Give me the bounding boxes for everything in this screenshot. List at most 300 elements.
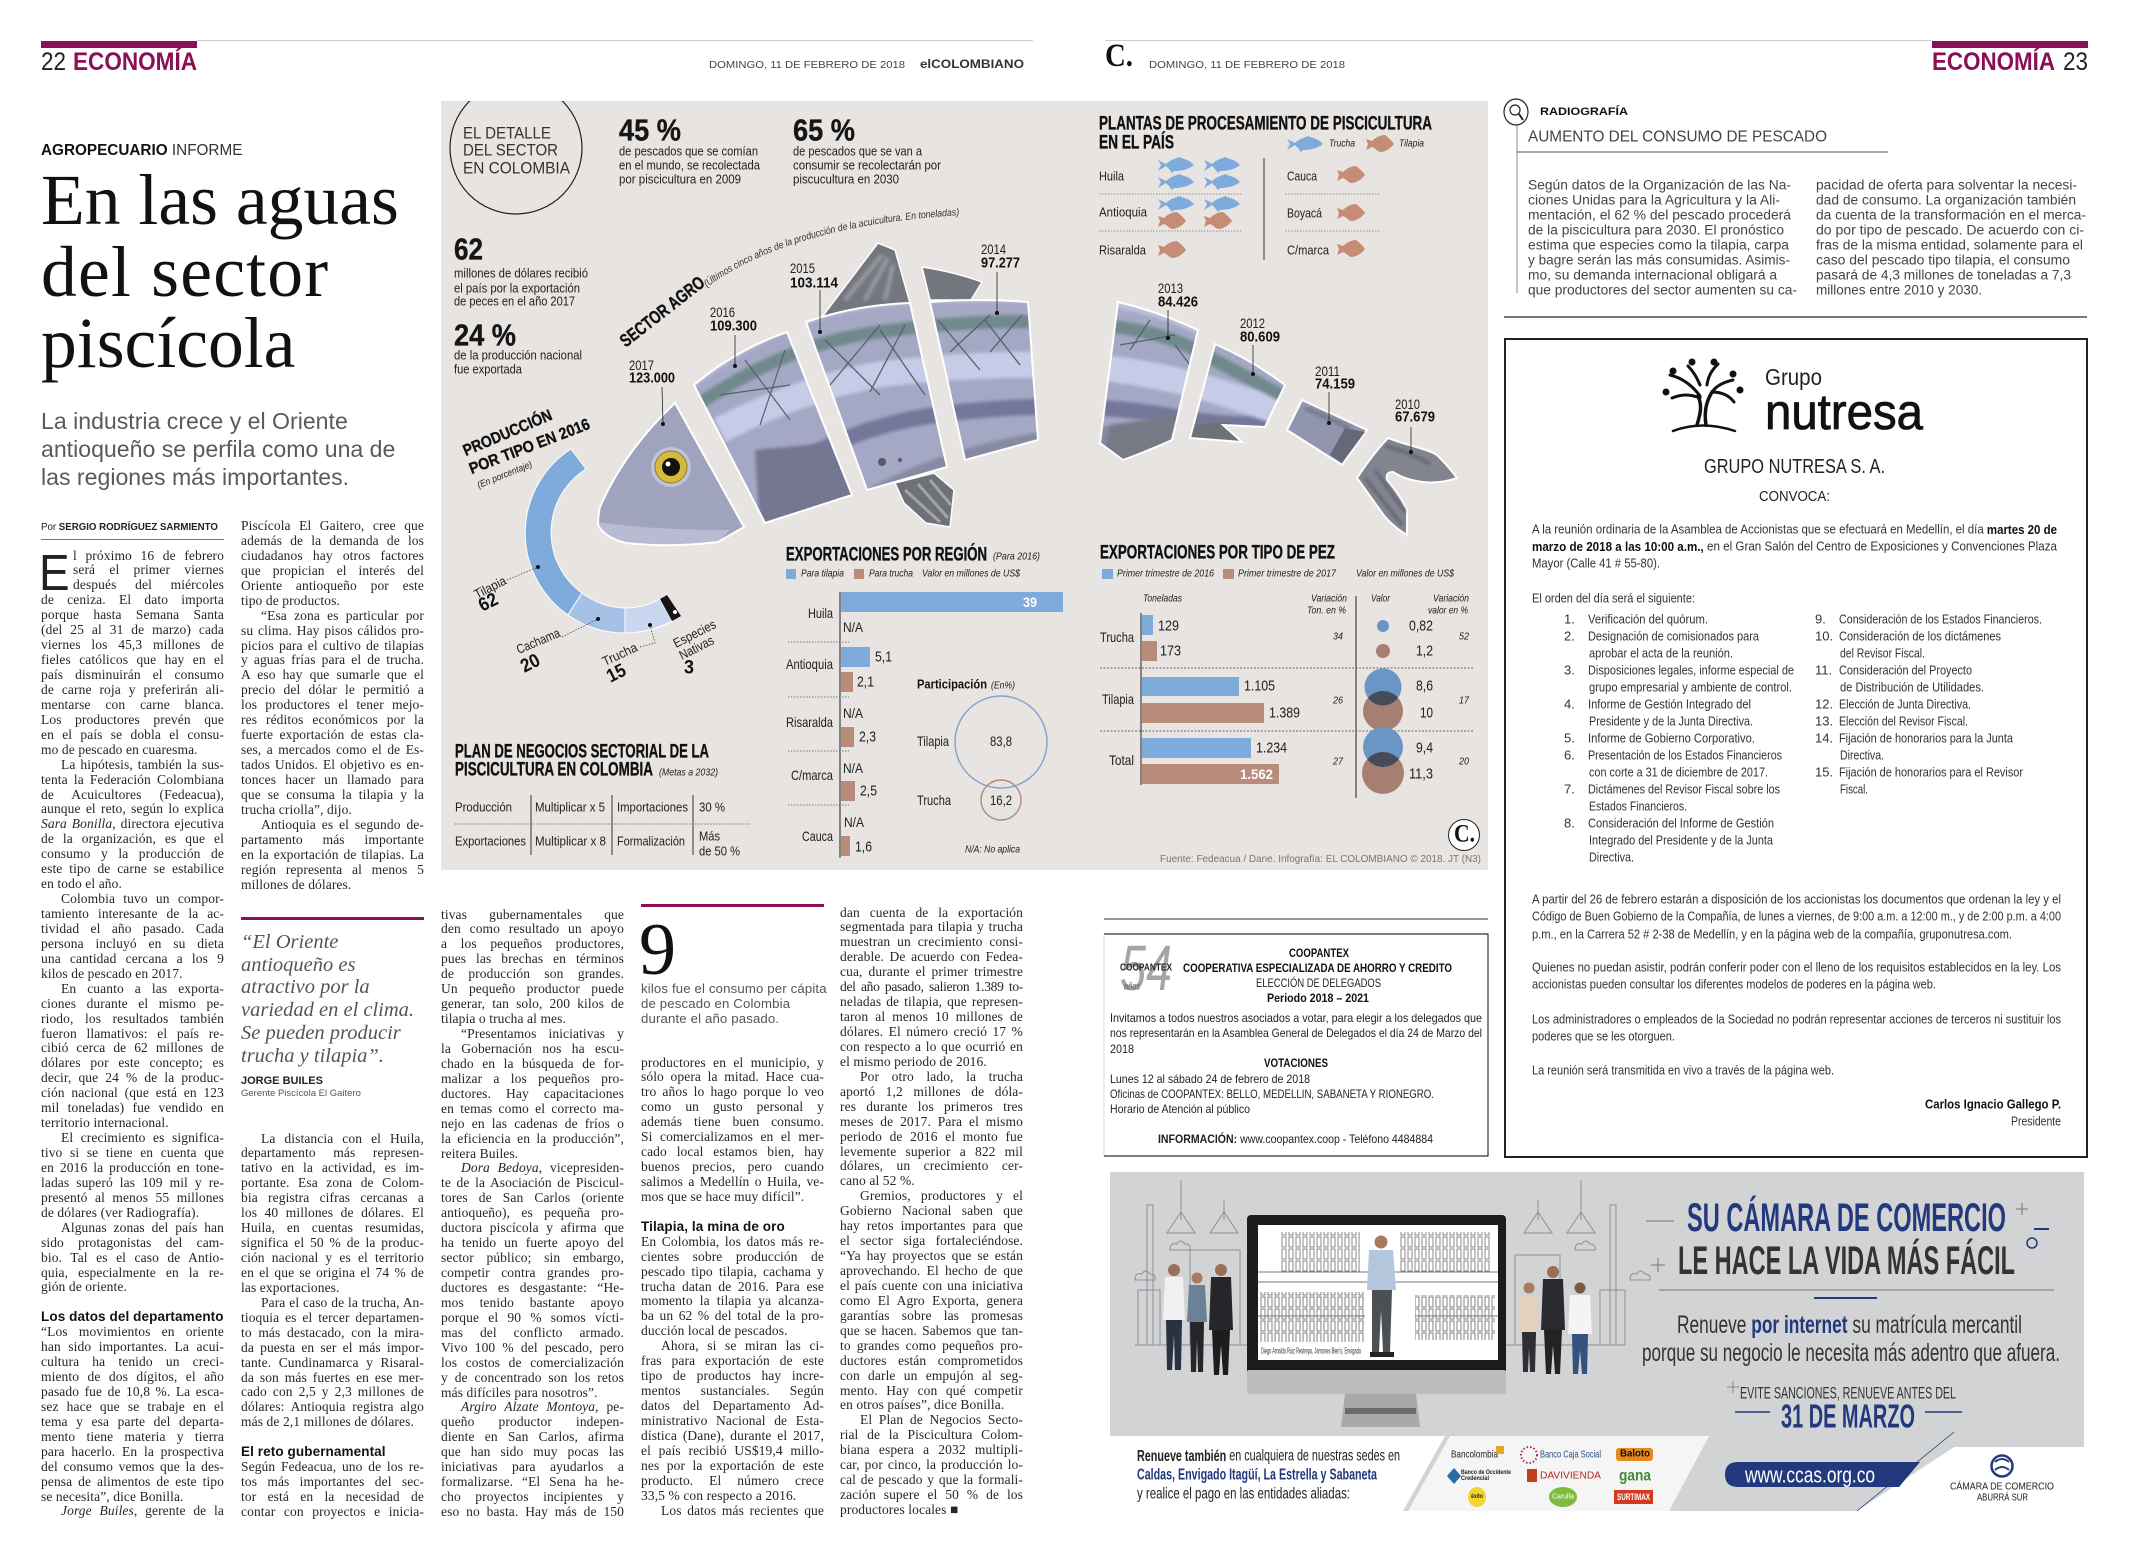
panel: coopantex notice: ELECCIÓN DE DELEGADOS — [1256, 975, 1381, 990]
panel: grupo nutresa notice: GRUPO NUTRESA S. A. — [1704, 456, 1885, 478]
article column 5 — [840, 904, 1023, 1517]
illustration: computer monitor with store — [1247, 1215, 1506, 1427]
article column 1: tividad el año pasado. Cada — [41, 921, 224, 936]
article column 3: y de concentrado son los retos — [441, 1370, 624, 1385]
article column 4: datos del Departamento Ad- — [641, 1398, 824, 1413]
list: orden del día, right: Consideración de los dictámenes — [1839, 628, 2001, 644]
article column 5: Gremios, productores y el — [860, 1188, 1023, 1203]
stat: 45 %: en el mundo, se recolectada — [619, 158, 761, 172]
panel: radiografía: ciones Unidas para la Agricultura y la Ali- — [1528, 192, 1780, 208]
article column 1: después del miércoles — [73, 577, 224, 592]
chart: producción por tipo donut: Cachama — [514, 625, 563, 657]
article column 1 — [41, 548, 224, 1518]
chart: producción por tipo donut: POR TIPO EN 2016 — [467, 416, 593, 478]
logo: cámara de comercio aburrá sur — [1950, 1456, 2054, 1504]
article column 1: l próximo 16 de febrero — [73, 548, 224, 562]
article column 4: ba un 62 % del total de la pro- — [641, 1308, 824, 1323]
list: orden del día, right: Elección de Junta Directiva. — [1839, 696, 1971, 712]
table: plan de negocios sectorial: Multiplicar x 8 — [535, 834, 606, 848]
callout: 9 kilos — [641, 904, 824, 1032]
article column 2, top: precio del dólar le permitió a — [241, 682, 424, 697]
chart: exportaciones por tipo de pez: Primer trimestre de 2016 — [1117, 568, 1214, 580]
chart: exportaciones por tipo de pez: Total — [1109, 752, 1134, 768]
article column 3: tilapia o trucha al mes. — [441, 1011, 566, 1026]
article column 1: Colombia tuvo un compor- — [61, 891, 224, 906]
stat: 62 millones: millones de dólares recibió — [454, 266, 588, 280]
article column 3: te de la Asociación de Piscicul- — [441, 1175, 624, 1190]
article column 1: tenta la Federación Colombiana — [41, 772, 224, 787]
article column 2, top: ses, a mercados como el de Es- — [241, 742, 424, 757]
article column 3: generar, tan solo, 200 kilos de — [441, 996, 624, 1011]
article column 4: pescado tipo tilapia, cachama y — [641, 1264, 824, 1279]
stat: 65 %: 65 % — [793, 112, 855, 148]
article column 2, top: los productores el tener mejo- — [241, 697, 424, 712]
chart: exportaciones por tipo de pez: 17 — [1459, 696, 1469, 706]
list: orden del día, right: de Distribución de Utilidades. — [1840, 680, 1984, 694]
labels: years and tonnage: 2012 — [1240, 315, 1265, 331]
list: orden del día, right: Fijación de honorarios para el Revisor — [1839, 764, 2024, 780]
table: plan de negocios sectorial: PLAN DE NEGOCIOS SECTORIAL DE LA — [455, 742, 709, 762]
article column 4: En Colombia, los datos más re- — [641, 1234, 824, 1249]
article column 5: meses de 2017. Para el mismo — [840, 1114, 1023, 1129]
article column 1: mento tiene materia y tierra — [41, 1429, 224, 1444]
panel: grupo nutresa notice: Grupo — [1765, 364, 1822, 390]
panel: infographic — [441, 101, 1525, 870]
article column 1: porque hasta Semana Santa — [41, 607, 224, 622]
article column 1: del consumo vemos que la des- — [41, 1459, 224, 1474]
panel: radiografía: pasará de 4,3 millones de toneladas a 7,3 — [1816, 268, 2071, 282]
article column 5: mento. Hay con qué competir — [840, 1382, 1023, 1398]
panel: radiografía: Según datos de la Organización de las Na- — [1528, 178, 1791, 192]
list: orden del día, right: 10. — [1815, 628, 1833, 644]
article column 5: del año pasado, salieron 1.389 to- — [840, 979, 1023, 994]
chart: exportaciones por tipo de pez: Ton. en % — [1307, 606, 1346, 616]
labels: years and tonnage: 2017 — [629, 357, 654, 373]
illustration: fish cut in segments — [597, 242, 1458, 546]
chart: participación circles: Tilapia — [917, 733, 949, 749]
chart: exportaciones por región: 2,1 — [857, 674, 874, 690]
labels: years and tonnage: 103.114 — [790, 274, 839, 292]
article column 3: reitera Builes. — [441, 1146, 518, 1160]
article column 2, top: y aguas frías para el de trucha. — [241, 652, 424, 667]
icon: magnifier — [1504, 99, 1528, 125]
stat: 45 %: de pescados que se comían — [619, 144, 758, 158]
article column 2, bottom: las exportaciones. — [241, 1280, 340, 1295]
list: orden del día, left: Verificación del quórum. — [1588, 612, 1708, 626]
article column 2, top: trucha criolla”, dijo. — [241, 802, 352, 817]
article column 5: cal de pescado y que la formali- — [840, 1472, 1023, 1487]
icon: el colombiano logo — [1448, 820, 1480, 850]
article column 3: a los pequeños productores, — [441, 936, 624, 951]
banner bottom strip: other locations: y realice el pago en las entidades aliadas: — [1137, 1486, 1350, 1502]
article column 1: mo de pescado en cuaresma. — [41, 742, 198, 757]
panel: radiografía: millones entre 2010 y 2030. — [1816, 282, 1982, 298]
chart: exportaciones por tipo de pez: 52 — [1459, 632, 1469, 642]
article column 4: trucha datan de 2016. Para ese — [641, 1279, 824, 1294]
panel: coopantex notice: Horario de Atención al público — [1110, 1102, 1250, 1116]
article column 4: producto. El número crece — [641, 1473, 824, 1488]
table: plan de negocios sectorial: Multiplicar x 5 — [535, 800, 605, 814]
chart: exportaciones por región: Cauca — [802, 828, 833, 844]
list: orden del día, right: Consideración del Proyecto — [1839, 662, 1972, 678]
chart: producción por tipo donut: 20 — [517, 650, 544, 677]
illustration: city line art — [1135, 1180, 1650, 1345]
list: orden del día, right: 15. — [1815, 764, 1833, 780]
chart: exportaciones por tipo de pez: Trucha — [1100, 629, 1134, 645]
article column 2, top: ciudadanos hay otros factores — [241, 548, 424, 563]
chart: exportaciones por tipo de pez: Tilapia — [1102, 691, 1134, 707]
article column 5: to grandes como pequeños pro- — [840, 1338, 1023, 1353]
article column 2, bottom: cado con 2,5 y 2,3 millones de — [241, 1384, 424, 1399]
article column 4: cientes sobre producción de — [641, 1249, 824, 1264]
article column 5: derable. De acuerdo con Fedea- — [840, 949, 1023, 964]
article column 1: este tipo de carne se estabilice — [41, 861, 224, 876]
article column 4: buenos precios, pero cuando — [641, 1159, 824, 1174]
url pill — [1725, 1432, 2084, 1511]
chart: exportaciones por tipo de pez: 1.105 — [1244, 678, 1275, 694]
heading: sector agro: SECTOR AGRO — [616, 272, 709, 351]
article column 2, bottom: bia registra cifras cercanas a — [241, 1190, 424, 1205]
article column 1: cibió cerca de 62 millones de — [41, 1040, 224, 1055]
article column 1: consumo y la producción de — [41, 846, 224, 861]
chart: exportaciones por tipo de pez: 1.234 — [1256, 740, 1287, 756]
chart: participación circles: Participación — [917, 676, 987, 692]
chart: exportaciones por tipo de pez: EXPORTACIONES POR TIPO DE PEZ — [1100, 542, 1335, 564]
article column 3: cho proyectos incipientes y — [441, 1489, 624, 1504]
source credit: Fuente: Fedeacua / Dane. Infografía: EL COLOMBIANO © 2018. JT (N3) — [1160, 853, 1481, 865]
callout: el detalle del sector: EL DETALLE — [463, 124, 551, 142]
chart: exportaciones por tipo de pez: 1.389 — [1269, 704, 1300, 722]
panel: grupo nutresa notice — [1505, 339, 2087, 1157]
article column 1: sez hace que se trabaje en el — [41, 1399, 224, 1414]
article column 4: ministrativo Nacional de Esta- — [641, 1413, 824, 1428]
article column 5: el país cuente con una iniciativa — [840, 1278, 1023, 1293]
panel: radiografía: RADIOGRAFÍA — [1540, 105, 1628, 118]
table: plan de negocios sectorial: Importaciones — [617, 800, 688, 814]
article column 2, top: en la exportación de tilapias. La — [241, 847, 424, 862]
chart: exportaciones por región: Para tilapia — [801, 568, 844, 580]
article column 2, top: partamento más importante — [241, 832, 424, 847]
panel: coopantex notice: nos representarán en la Asamblea General de Delegados el día 24 de Marzo del — [1110, 1026, 1482, 1040]
article column 5: neladas de tilapia, que represen- — [840, 994, 1023, 1009]
article column 4: cado local estamos bien, hay — [641, 1144, 824, 1159]
segment 2013 — [1099, 300, 1199, 461]
text: notice body: marzo de 2018 a las 10:00 a.m., en el Gran Salón del Centro de Exposiciones y Convenciones Plaza — [1532, 538, 2058, 554]
stat: 65 %: consumir se recolectarán por — [793, 158, 942, 172]
heading: sector agro — [616, 208, 959, 351]
article column 5: biana espera a 2032 multipli- — [840, 1442, 1023, 1457]
page 22 header: elCOLOMBIANO — [920, 57, 1024, 71]
list: orden del día, left: 6. — [1564, 748, 1575, 762]
article column 3: la Gobernación nos ha escu- — [441, 1041, 624, 1056]
chart: exportaciones por tipo de pez: Valor — [1371, 594, 1391, 604]
banner deadline: 31 DE MARZO — [1781, 1398, 1915, 1434]
article column 1: mentarse con carne blanca. — [41, 697, 224, 712]
chart: exportaciones por región: N/A — [844, 814, 865, 830]
article column 3: diente en San Carlos, afirma — [441, 1429, 624, 1444]
labels: years and tonnage: 2014 — [981, 241, 1006, 257]
stat: 24 % — [454, 318, 582, 376]
chart: producción por tipo donut: 3 — [684, 658, 694, 678]
list: orden del día, left: Informe de Gestión Integrado del — [1588, 696, 1751, 712]
article column 1: fueron llamativos: el país re- — [41, 1026, 224, 1040]
article column 2, top — [241, 518, 424, 892]
page 22 header: 22 — [41, 48, 66, 76]
list: orden del día, right: Consideración de los Estados Financieros. — [1839, 612, 2042, 626]
segment 2017 head — [598, 403, 744, 545]
panel: radiografía: da cuenta de la transformación en el merca- — [1816, 208, 2086, 222]
table: plan de negocios sectorial: Más — [699, 828, 720, 844]
list: orden del día, right: Directiva. — [1840, 748, 1884, 762]
article column 4: Tilapia, la mina de oro — [641, 1219, 785, 1234]
pull quote: “El Oriente antioqueño es atractivo por la variedad en el clima. Se pueden producir trucha y tilapia”. — [241, 931, 414, 1067]
article column 2, bottom: da puesta en ser el más impor- — [241, 1340, 424, 1355]
article column 5: segmentada para tilapia y trucha — [840, 919, 1023, 934]
article column 1: de la organización, es que el — [41, 831, 224, 846]
page 23 header — [1105, 38, 2088, 76]
banner deadline: EVITE SANCIONES, RENUEVE ANTES DEL — [1740, 1384, 1956, 1402]
article column 2, bottom: tativo en la actividad, es im- — [241, 1160, 424, 1175]
segment 2015 — [804, 302, 948, 491]
article column 5: levemente superior a 822 mil — [840, 1144, 1023, 1158]
article column 3: sector público; sin embargo, — [441, 1250, 624, 1265]
list: orden del día, right — [1815, 612, 2042, 796]
list: orden del día, left: aprobar el acta de la reunión. — [1589, 646, 1733, 660]
pull quote: JORGE BUILES — [241, 1075, 323, 1087]
article column 4: tro años lo hago porque lo veo — [641, 1084, 824, 1099]
chart: exportaciones por tipo de pez: 10 — [1420, 704, 1433, 722]
article column 4: Si comercializamos en el mer- — [641, 1129, 824, 1144]
pull quote — [241, 917, 424, 1105]
article column 1: La hipótesis, también la sus- — [61, 757, 224, 772]
stat: 45 %: 45 % — [619, 112, 681, 148]
table: plan de negocios sectorial: Formalización — [617, 834, 685, 848]
article column 2, bottom — [241, 1130, 424, 1519]
article column 4: como un gusto personal y — [641, 1099, 824, 1114]
article column 4: Los datos más recientes que — [661, 1503, 824, 1518]
callout: el detalle del sector — [449, 101, 583, 215]
byline — [41, 520, 224, 540]
labels: years and tonnage: 2016 — [710, 304, 735, 320]
chart: exportaciones por región: 1,6 — [855, 838, 872, 856]
stat: 62 millones — [454, 232, 588, 308]
article column 5: car, por cinco, la producción lo- — [840, 1457, 1023, 1472]
chart: participación circles: (En%) — [991, 680, 1015, 692]
article column 1: en todo el año. — [41, 876, 122, 891]
list: orden del día, left: 2. — [1564, 628, 1575, 644]
article column 2, bottom: Según Fedeacua, uno de los re- — [241, 1459, 424, 1474]
chart: exportaciones por tipo de pez: 11,3 — [1409, 766, 1433, 782]
icon: nutresa tree — [1662, 358, 1744, 431]
article column 3: ductores es desgastante: “He- — [441, 1280, 624, 1295]
list: orden del día, right: Fijación de honorarios para la Junta — [1839, 730, 2014, 746]
article column 1: quia, especialmente en la re- — [41, 1264, 224, 1280]
chart: plantas de procesamiento: Antioquia — [1099, 204, 1148, 220]
article column 1: para hacerlo. En la prospectiva — [41, 1444, 224, 1459]
subtitle: La industria crece y el Oriente antioqueño se perfila como una de las regiones más importantes. — [41, 408, 395, 490]
text: notice closing paragraphs: La reunión será transmitida en vivo a través de la página web. — [1532, 1062, 1834, 1078]
article column 3: Dora Bedoya, vicepresiden- — [461, 1160, 624, 1175]
stat: 24 %: de la producción nacional — [454, 348, 582, 362]
labels: years and tonnage: 2011 — [1315, 363, 1340, 379]
article column 1: una cantidad cercana a los 9 — [41, 951, 224, 966]
bank logos: Carulla — [1552, 1494, 1574, 1500]
article column 5: garantías sobre las promesas — [840, 1308, 1023, 1323]
panel: coopantex notice: 2018 — [1110, 1042, 1134, 1056]
icon: el colombiano logo: C. — [1454, 820, 1475, 848]
article column 2, top: millones de dólares. — [241, 876, 351, 892]
chart: exportaciones por región: Para trucha — [869, 568, 913, 580]
article column 2, bottom: El reto gubernamental — [241, 1444, 386, 1459]
list: orden del día, right: 14. — [1815, 730, 1833, 746]
bank logos — [1447, 1446, 1653, 1507]
article column 4: ducción local de pescados. — [641, 1323, 788, 1338]
article column 1: tamiento interesante de la ac- — [41, 906, 224, 921]
bank logos: Baloto — [1620, 1448, 1650, 1460]
text: notice closing paragraphs: p.m., en la Carrera 52 # 2-38 de Medellín, y en la página web de la compañía, gruponutresa.com. — [1532, 926, 2012, 942]
panel: radiografía: que productores del sector aumenten su ca- — [1528, 282, 1797, 298]
list: orden del día, right: del Revisor Fiscal. — [1840, 646, 1925, 660]
panel: coopantex notice: INFORMACIÓN: www.coopantex.coop - Teléfono 4484884 — [1158, 1131, 1433, 1146]
chart: exportaciones por tipo de pez: 1.562 — [1240, 766, 1273, 782]
panel: grupo nutresa notice: CONVOCA: — [1759, 489, 1830, 505]
article column 3: queño productor indepen- — [441, 1414, 624, 1429]
article column 3: competir contra grandes pro- — [441, 1265, 624, 1280]
article column 1: riodo, los resultados también — [41, 1011, 224, 1026]
text: notice closing paragraphs: Carlos Ignacio Gallego P. — [1925, 1096, 2061, 1112]
stat: 62 millones: de peces en el año 2017 — [454, 294, 575, 308]
article column 5: periodo de 2016 el monto fue — [840, 1129, 1023, 1144]
chart: producción por tipo donut — [460, 405, 719, 687]
article column 1: gión de oriente. — [41, 1279, 127, 1294]
banner message — [1642, 1311, 2060, 1367]
chart: producción por tipo donut: 15 — [603, 660, 630, 687]
article column 1: cultura ha tenido un creci- — [41, 1354, 224, 1369]
article column 3: iniciativas para ayudarlos a — [441, 1459, 624, 1474]
bank logos: Bancolombia — [1451, 1450, 1498, 1460]
article column 2, bottom: los 40 millones de dólares. El — [241, 1205, 424, 1220]
article column 2, top: A eso hay que sumarle que el — [241, 667, 424, 682]
chart: producción por tipo donut: Trucha — [600, 639, 640, 669]
list: orden del día, left: Dictámenes del Revisor Fiscal sobre los — [1588, 782, 1780, 796]
table: plan de negocios sectorial: de 50 % — [699, 844, 740, 858]
chart: exportaciones por región: N/A — [843, 760, 864, 776]
table: plan de negocios sectorial: (Metas a 2032) — [659, 768, 718, 778]
stat: 45 %: por piscicultura en 2009 — [619, 172, 741, 186]
chart: plantas de procesamiento: Huila — [1099, 168, 1125, 184]
chart: exportaciones por tipo de pez: Primer trimestre de 2017 — [1238, 568, 1336, 580]
chart: exportaciones por región: 5,1 — [875, 648, 892, 666]
article column 1: Los datos del departamento — [41, 1309, 224, 1324]
labels: years and tonnage: 2015 — [790, 260, 815, 276]
article column 2, top: su clima. Hay pisos cálidos pro- — [241, 623, 424, 638]
panel: radiografía: estima que especies como la tilapia, carpa — [1528, 238, 1789, 252]
article column 2, bottom: tos más importantes del sec- — [241, 1474, 424, 1489]
chart: exportaciones por tipo de pez: Valor en millones de US$ — [1356, 568, 1454, 580]
chart: plantas de procesamiento: Boyacá — [1287, 206, 1323, 220]
text: notice closing paragraphs: Código de Buen Gobierno de la Compañía, de lunes a viernes, de 9:00 a.m. a 12:00 m., y de 2:00 p.m. a 4:00 — [1532, 908, 2061, 924]
article column 1: de carne roja y preferirán ali- — [41, 682, 224, 697]
article column 1: presentó al menos 55 millones — [41, 1190, 224, 1205]
panel: radiografía: caso del pescado tipo tilapia, el consumo — [1816, 252, 2070, 268]
chart: exportaciones por tipo de pez: Variación — [1433, 594, 1469, 604]
chart: exportaciones por región: 2,5 — [860, 782, 877, 800]
article column 3: antioqueño), es pequeña pro- — [441, 1205, 624, 1220]
article column 2, bottom: contar con proyectos e inicia- — [241, 1504, 424, 1519]
article column 4: el país recibió US$19,4 millo- — [641, 1443, 824, 1458]
article column 5: “Ya hay proyectos que se están — [840, 1248, 1023, 1263]
page 23 header: C. — [1105, 38, 1133, 74]
article column 2, top: picios para el cultivo de tilapias — [241, 638, 424, 652]
article column 2, top: región representa al menos 5 — [241, 862, 424, 877]
article column 1: tivo si se tiene en cuenta que — [41, 1145, 224, 1160]
article column 1: viernes los 45,3 millones de — [41, 637, 224, 652]
chart: plantas de procesamiento — [1099, 114, 1432, 260]
text: notice closing paragraphs: Presidente — [2011, 1114, 2061, 1128]
text: notice closing paragraphs: accionistas pueden consultar los diferentes modelos de poderes en la página web. — [1532, 976, 1936, 992]
article column 3: “Presentamos iniciativas y — [461, 1026, 624, 1041]
chart: participación circles: 16,2 — [990, 792, 1012, 808]
article column 2, top: Oriente antioqueño por este — [241, 578, 424, 593]
article column 5: ductores están comprometidos — [840, 1353, 1023, 1368]
article column 1: en el país se dobla el consu- — [41, 727, 224, 742]
drop cap: E — [39, 544, 70, 601]
article column 5: que se hacen. Sabemos que tan- — [840, 1323, 1023, 1338]
article column 1: En cuanto a las exporta- — [61, 981, 224, 996]
table: plan de negocios sectorial: Exportaciones — [455, 834, 526, 848]
panel: radiografía: pacidad de oferta para solventar la necesi- — [1816, 178, 2077, 192]
article column 3: Vivo 100 % del pescado, pero — [441, 1340, 624, 1355]
chart: plantas de procesamiento: Trucha — [1329, 138, 1355, 150]
article column 3: Argiro Alzate Montoya, pe- — [461, 1399, 624, 1414]
panel: coopantex notice: Invitamos a todos nuestros asociados a votar, para elegir a los delegados que — [1110, 1011, 1482, 1025]
article column 5: res durante los primeros tres — [840, 1099, 1023, 1114]
chart: exportaciones por tipo de pez: 173 — [1160, 642, 1181, 660]
panel: coopantex notice: COOPANTEX — [1289, 946, 1349, 960]
article column 3: la eficiencia en la producción”, — [441, 1131, 624, 1146]
chart: plantas de procesamiento: C/marca — [1287, 242, 1330, 258]
page 22 header: ECONOMÍA — [73, 47, 197, 76]
icon: coopantex 54 años logo: años — [1124, 982, 1140, 992]
article column 3: pues las brechas en términos — [441, 951, 624, 966]
chart: plantas de procesamiento: PLANTAS DE PROCESAMIENTO DE PISCICULTURA — [1099, 114, 1432, 134]
article column 4: tipo de productos hay incre- — [641, 1368, 824, 1383]
chart: exportaciones por tipo de pez: 20 — [1458, 756, 1469, 768]
article column 1: decir, que 24 % de la produc- — [41, 1070, 224, 1085]
bank logos: éxito — [1471, 1494, 1483, 1500]
article column 2, top: tonces hacer un llamado para — [241, 772, 424, 787]
segment 2011 — [1287, 400, 1367, 465]
article column 3: malizar a los pequeños pro- — [441, 1071, 624, 1086]
article column 2, top: Piscícola El Gaitero, cree que — [241, 518, 424, 533]
callout: 9 kilos: kilos fue el consumo per cápita de pescado en Colombia durante el año pasado. — [641, 981, 827, 1026]
fish fins — [822, 243, 982, 527]
article column 2, top: tipo de productos. — [241, 593, 340, 608]
article column 4: Ahora, si se miran las ci- — [661, 1338, 824, 1353]
chart: exportaciones por tipo de pez: Toneladas — [1143, 594, 1182, 604]
article column 2, bottom: más de 2,1 millones de dólares. — [241, 1414, 414, 1429]
article column 2, bottom: La distancia con el Huila, — [261, 1130, 424, 1146]
article column 4 — [641, 1054, 824, 1518]
chart: exportaciones por región: Risaralda — [786, 714, 833, 730]
labels: years and tonnage: 84.426 — [1158, 294, 1198, 310]
article column 2, bottom: en el que se origina el 74 % de — [241, 1265, 424, 1280]
table: plan de negocios sectorial: 30 % — [699, 800, 725, 814]
article column 2, bottom: dólares: Antioquia registra algo — [241, 1399, 424, 1414]
table: plan de negocios sectorial: Producción — [455, 800, 512, 814]
panel: cámara de comercio banner — [1110, 1172, 2084, 1511]
article column 1: kilos de pescado en 2017. — [41, 966, 183, 981]
